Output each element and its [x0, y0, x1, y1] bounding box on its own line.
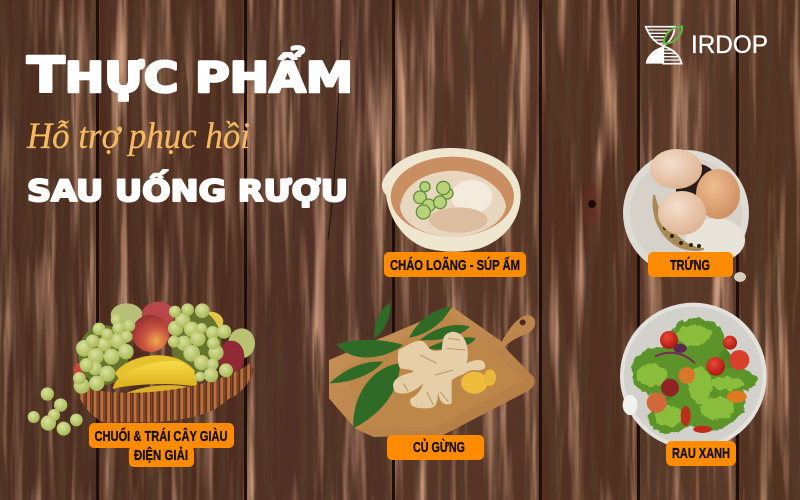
label: chuối và trái cây giàu điện giải: CHUỐI & TRÁI CÂY GIÀU [94, 427, 228, 445]
icon: fruit basket [28, 302, 255, 436]
heading: sau uống rượu: SAU UỐNG RƯỢU [27, 170, 348, 208]
icon: porridge bowl [382, 148, 521, 252]
label: chuối và trái cây giàu điện giải [89, 423, 234, 467]
label: trứng: TRỨNG [670, 256, 710, 274]
logo wordmark: IRDOP [691, 31, 768, 59]
subtitle: Hỗ trợ phục hồi: Hỗ trợ phục hồi [26, 116, 250, 157]
label: cháo loãng - súp ấm [384, 252, 526, 277]
label: rau xanh [666, 441, 736, 466]
panel: ginger [329, 302, 535, 460]
panel: eggs [623, 149, 749, 282]
label: rau xanh: RAU XANH [672, 445, 730, 462]
icon: ginger on cutting board [329, 302, 535, 437]
icon: salad plate [620, 303, 767, 449]
label: củ gừng: CỦ GỪNG [413, 438, 465, 456]
label: chuối và trái cây giàu điện giải: ĐIỆN GIẢI [134, 446, 188, 464]
logo: IRDOP [646, 27, 768, 64]
heading: Thực phẩm: THỰC PHẨM [27, 45, 353, 104]
panel: fruit basket [28, 302, 255, 467]
label: củ gừng [387, 435, 484, 460]
icon: eggs on plate [623, 149, 749, 282]
label: cháo loãng - súp ấm: CHÁO LOÃNG - SÚP ẤM [390, 256, 520, 274]
icon: hourglass with leaf [646, 27, 682, 64]
panel: porridge [382, 148, 526, 277]
panel: salad [620, 303, 767, 466]
